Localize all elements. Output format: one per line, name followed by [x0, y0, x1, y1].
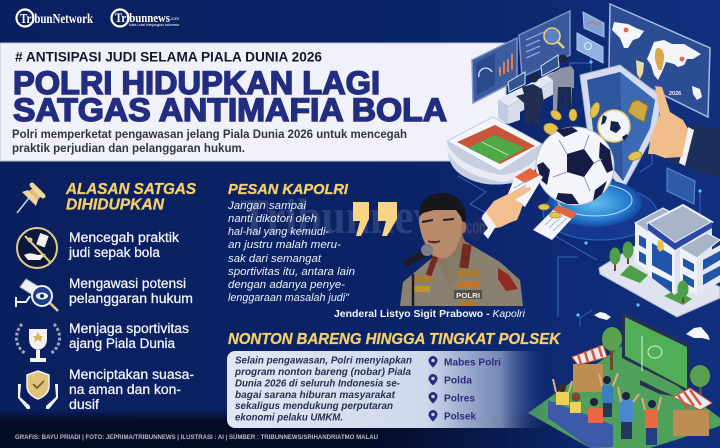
panel body text: ekonomi pelaku UMKM.	[235, 412, 343, 424]
intro text	[12, 129, 407, 155]
item text: mengawasi: Mengawasi potensi	[69, 276, 186, 291]
main title	[13, 65, 447, 128]
data cards	[577, 12, 604, 63]
speaker caption: Jenderal Listyo Sigit Prabowo - Kapolri	[334, 309, 526, 320]
item text: menjaga: ajang Piala Dunia	[69, 336, 175, 351]
nobar: cheering crowd	[548, 373, 661, 448]
logo: TribunNetwork: TribunNetwork	[20, 12, 93, 27]
heading: alasan satgas dihidupkan: ALASAN SATGAS	[65, 181, 197, 198]
location list: Mabes Polri	[444, 356, 501, 368]
hand with betting slip	[462, 168, 543, 242]
watermark: .com	[463, 217, 489, 237]
quote text: Jangan sampai	[227, 200, 307, 212]
circuit nodes	[576, 60, 702, 317]
panel: nonton bareng	[227, 351, 549, 428]
intro text: praktik perjudian dan pelanggaran hukum.	[12, 143, 245, 155]
quote text: dengan adanya penye-	[228, 279, 345, 291]
white header panel	[0, 43, 506, 161]
icon: trophy	[16, 324, 60, 362]
icon: no gambling	[17, 228, 57, 268]
item text: mencegah: Mencegah praktik	[69, 230, 179, 245]
item text: mengawasi: pelanggaran hukum	[69, 291, 193, 306]
illustration: police monitoring and football	[447, 4, 720, 448]
circuit lines	[458, 54, 700, 326]
operator in grey shirt	[547, 54, 574, 110]
item text: menciptakan	[69, 367, 194, 412]
photo: Kapolri speaking at microphone	[400, 193, 523, 306]
intro text: Polri memperketat pengawasan jelang Piala Dunia 2026 untuk mencegah	[12, 129, 407, 141]
item text: menjaga: Menjaga sportivitas	[69, 321, 189, 336]
shield	[580, 65, 662, 190]
logo: Tribunnews: Tribunnews	[115, 10, 170, 25]
monitor: gauge screen	[472, 38, 517, 103]
panel body text: program nonton bareng (nobar) Piala	[234, 367, 411, 378]
footer band	[0, 410, 600, 448]
location list: Polres	[444, 392, 475, 404]
nobar: grass field and screen	[528, 312, 720, 448]
police headquarters building	[599, 205, 720, 317]
item text: menjaga	[69, 321, 189, 351]
hand holding shield	[648, 86, 720, 176]
icon: surveillance camera	[16, 279, 58, 311]
footer credits: GRAFIS: BAYU PRIADI | FOTO: JEPRIMA/TRIBUNNEWS | ILUSTRASI : AI | SUMBER : TRIBUNNEWS/SRIHANDRIATMO MALAU	[15, 435, 378, 441]
world map screen: 2026	[669, 91, 681, 97]
main title: SATGAS ANTIMAFIA BOLA	[13, 92, 447, 128]
logo: Tribunnews: .com	[170, 16, 179, 21]
main title: POLRI HIDUPKAN LAGI	[13, 65, 380, 101]
icon: shield and hands	[18, 371, 58, 409]
item text: menciptakan: dusif	[69, 397, 99, 412]
soccer ball	[536, 127, 614, 205]
world map screen	[609, 4, 710, 117]
report card	[667, 168, 695, 204]
coins	[542, 101, 643, 162]
cloud top right	[686, 327, 710, 340]
quote text: hal-hal yang kemudi-	[228, 226, 329, 238]
watermark: Tribunnews	[240, 188, 462, 244]
item text: menciptakan: na aman dan kon-	[69, 382, 181, 397]
stadium	[447, 117, 542, 185]
quote text: nanti dikotori oleh	[228, 213, 317, 225]
item text: mengawasi	[69, 276, 193, 306]
heading: alasan satgas dihidupkan	[65, 181, 197, 214]
quote text: an justru malah meru-	[228, 239, 341, 251]
nobar: food stalls	[572, 345, 712, 436]
heading: pesan kapolri: PESAN KAPOLRI	[228, 181, 349, 198]
cloud	[594, 312, 611, 320]
item text: menciptakan: Menciptakan suasa-	[69, 367, 194, 382]
subheading: # ANTISIPASI JUDI SELAMA PIALA DUNIA 2026	[15, 50, 322, 64]
photo: Kapolri speaking at microphone: POLRI	[456, 293, 480, 300]
quote text: lenggaraan masalah judi"	[228, 292, 350, 304]
desk and operators	[498, 54, 574, 125]
item text: mencegah: judi sepak bola	[68, 245, 160, 260]
location list	[428, 356, 501, 422]
panel body text: bagai sarana hiburan masyarakat	[235, 390, 396, 401]
location list: Polsek	[444, 410, 476, 422]
logo: TribunNetwork	[16, 10, 93, 27]
icon: quotation marks	[353, 202, 397, 236]
monitor: magnifier screen	[519, 11, 570, 77]
logo: Tribunnews: Mata Lokal Menjangkau Indonesia	[129, 23, 179, 27]
icon: pushpin	[17, 185, 43, 213]
operator in dark uniform	[516, 74, 544, 125]
quote text: sak dari semangat	[228, 253, 322, 265]
panel body text	[234, 356, 412, 424]
betting slip 2 with coins	[533, 204, 577, 240]
quote text	[227, 200, 355, 304]
panel body text: sekaligus mendukung perputaran	[235, 401, 393, 412]
item text: mencegah	[68, 230, 179, 260]
panel body text: Selain pengawasan, Polri menyiapkan	[235, 356, 412, 366]
panel body text: Dunia 2026 di seluruh Indonesia se-	[235, 378, 401, 390]
holographic platform	[543, 179, 657, 240]
quote text: sportivitas itu, antara lain	[228, 266, 355, 278]
heading: nonton bareng: NONTON BARENG HINGGA TINGKAT POLSEK	[228, 331, 561, 348]
location list: Polda	[444, 374, 472, 386]
heading: alasan satgas dihidupkan: DIHIDUPKAN	[66, 196, 165, 214]
